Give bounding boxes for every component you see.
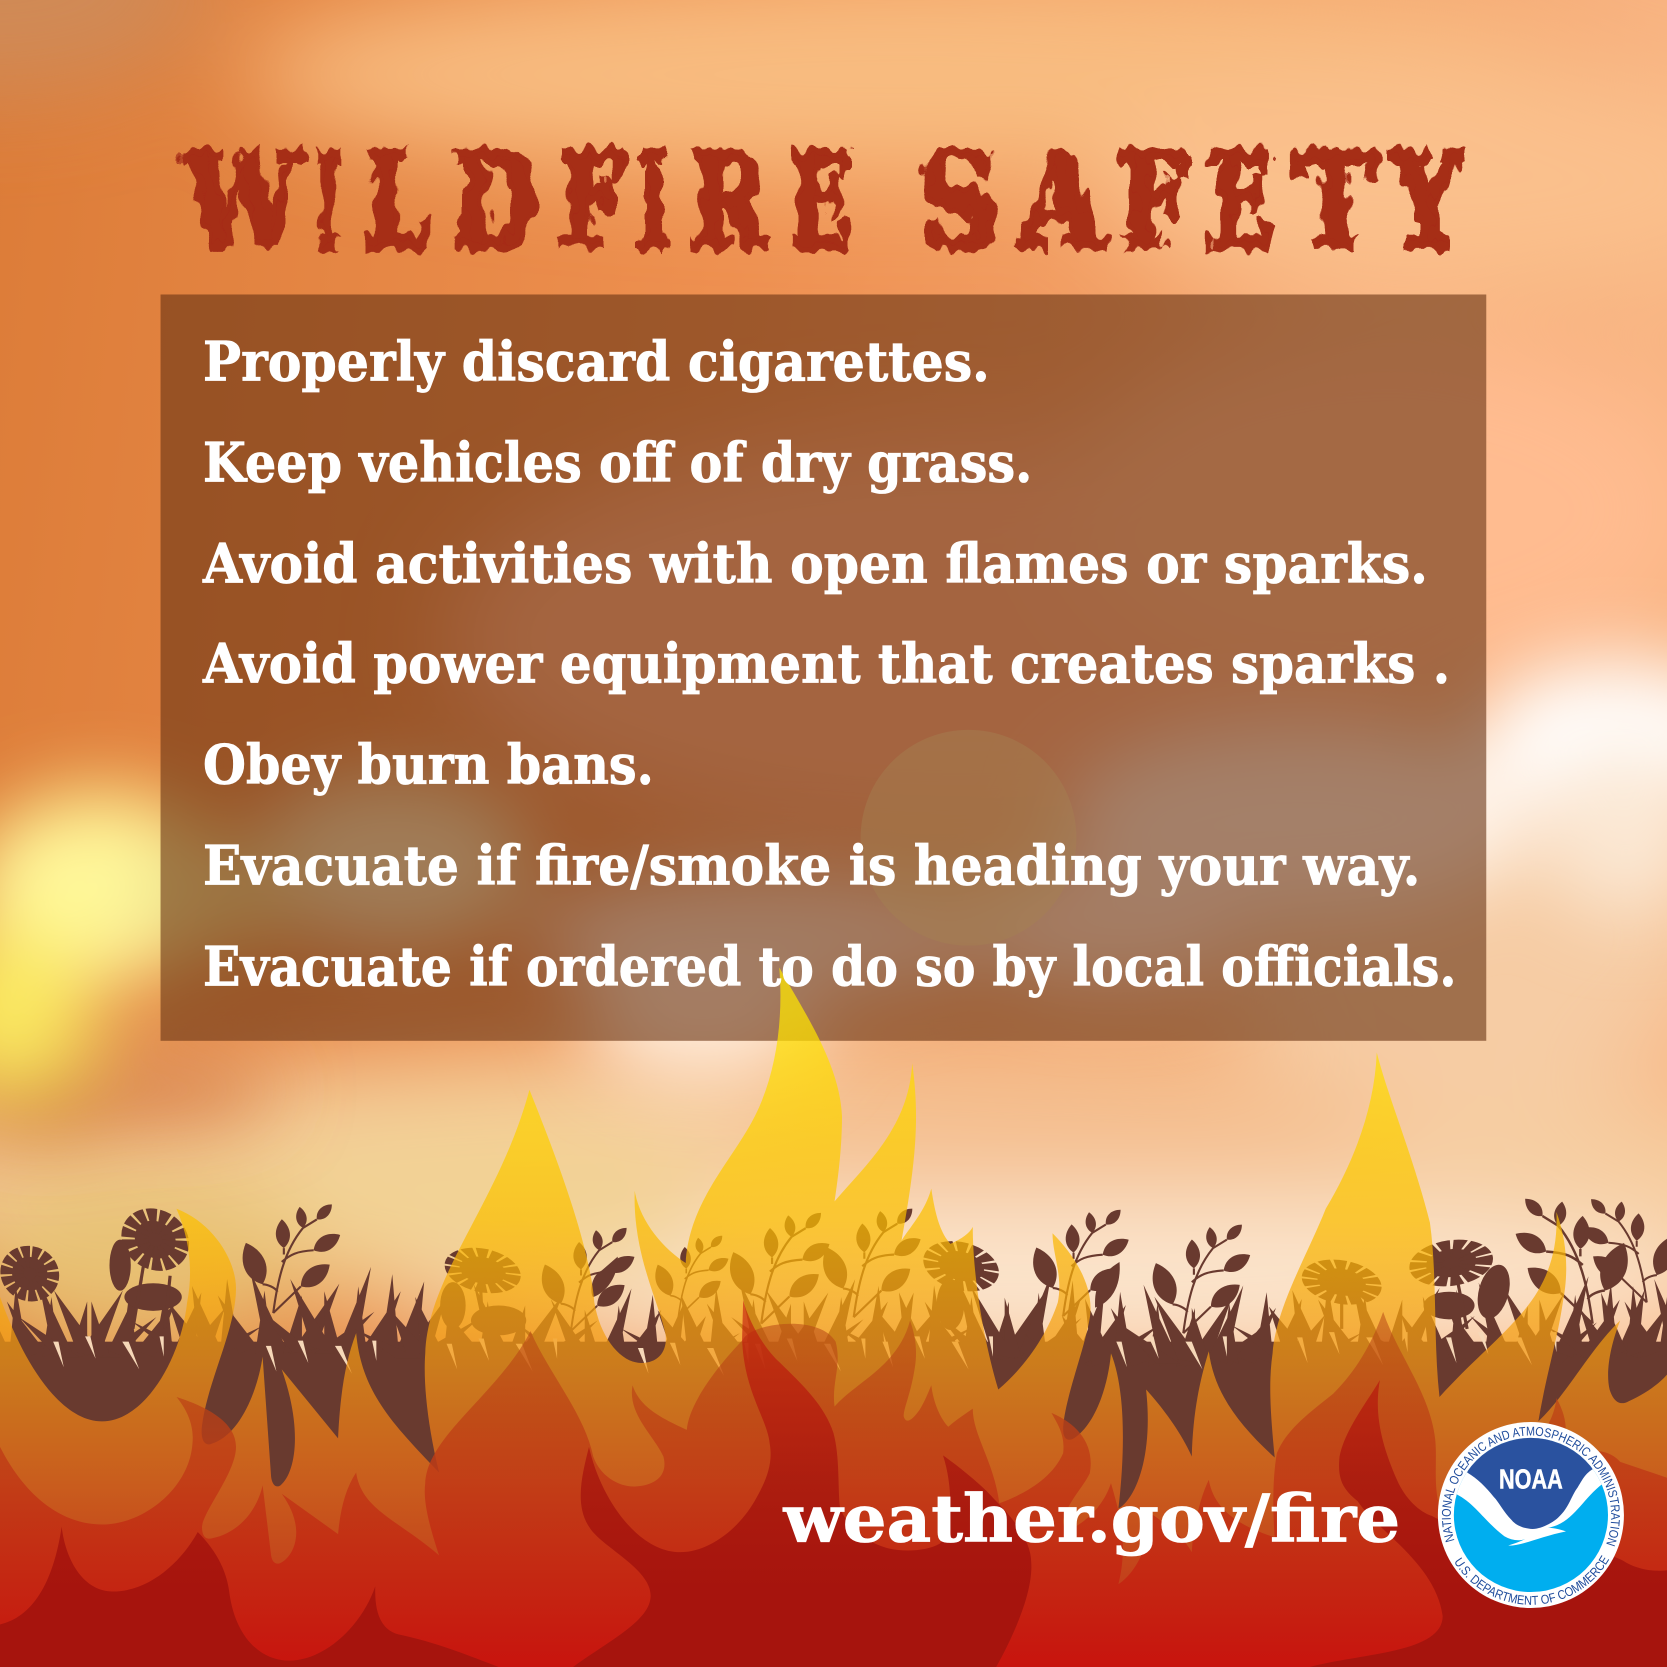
logo wordmark: NOAA bbox=[1499, 1463, 1563, 1494]
text block: safety tips: Evacuate if ordered to do so by local officials. bbox=[203, 935, 1456, 999]
text block: safety tips: Properly discard cigarettes. bbox=[203, 330, 990, 394]
title: I bbox=[315, 125, 342, 278]
title: A bbox=[1016, 125, 1104, 278]
text block: safety tips: Evacuate if fire/smoke is heading your way. bbox=[203, 834, 1420, 898]
text block: safety tips bbox=[202, 330, 1456, 999]
title: T bbox=[1294, 125, 1376, 278]
logo ring text bottom: U.S. DEPARTMENT OF COMMERCE bbox=[1455, 1555, 1610, 1605]
panel: safety tips backing bbox=[161, 294, 1486, 1041]
title: R bbox=[689, 125, 771, 278]
website url: weather.gov/fire bbox=[782, 1480, 1400, 1558]
title: L bbox=[364, 125, 432, 278]
plant silhouettes bbox=[0, 1195, 1667, 1667]
title: D bbox=[452, 125, 539, 278]
title: Y bbox=[1390, 125, 1462, 278]
title: S bbox=[919, 125, 1000, 278]
title: I bbox=[639, 125, 667, 278]
text block: safety tips: Avoid activities with open flames or sparks. bbox=[202, 532, 1428, 596]
title: F bbox=[1121, 125, 1188, 278]
text block: safety tips: Obey burn bans. bbox=[203, 733, 654, 797]
text block: safety tips: Avoid power equipment that creates sparks . bbox=[202, 632, 1450, 696]
title: W bbox=[183, 125, 302, 278]
flame layer: orange middle flames bbox=[0, 1312, 1667, 1667]
title: F bbox=[559, 125, 623, 278]
text block: safety tips: Keep vehicles off of dry grass. bbox=[203, 431, 1032, 495]
sun bbox=[861, 730, 1076, 946]
flame layer: yellow front flames bbox=[0, 967, 1667, 1667]
title: E bbox=[789, 125, 853, 278]
icon: NOAA logo bbox=[1438, 1422, 1624, 1608]
logo ring text top: NATIONAL OCEANIC AND ATMOSPHERIC ADMINISTRATION bbox=[1442, 1426, 1620, 1546]
flame layer: dark red front flames bbox=[0, 1300, 1667, 1667]
title: E bbox=[1209, 125, 1273, 278]
